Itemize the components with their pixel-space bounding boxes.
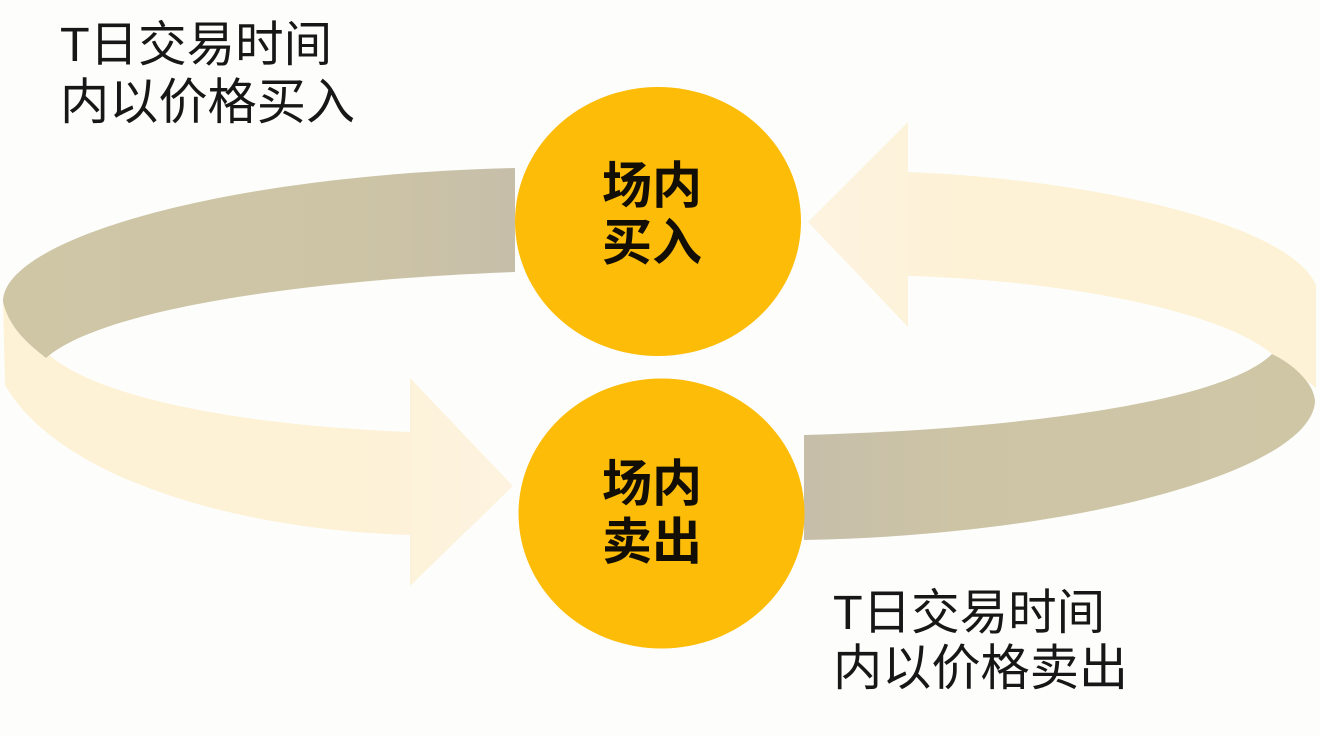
text: sell description: 内以价格卖出 <box>833 641 1128 696</box>
text: sell description: T日交易时间 <box>833 586 1105 640</box>
circle: buy <box>515 87 801 356</box>
circle: sell <box>518 378 804 648</box>
arrow: left tan band from buy circle <box>3 168 515 358</box>
text: sell description <box>833 586 1128 696</box>
text: buy description: 内以价格买入 <box>60 75 355 130</box>
arrow: right cream arrow to buy circle <box>808 122 1316 388</box>
arrow: left cream arrow to sell circle <box>3 302 513 586</box>
arrow: right tan band to sell circle <box>804 354 1315 540</box>
label: on-exchange sell <box>602 456 702 570</box>
label: on-exchange buy: 场内 <box>602 158 702 214</box>
label: on-exchange sell: 卖出 <box>602 514 702 570</box>
text: buy description: T日交易时间 <box>60 18 332 72</box>
text: buy description <box>60 18 355 130</box>
label: on-exchange buy <box>602 158 702 271</box>
label: on-exchange sell: 场内 <box>602 456 702 512</box>
label: on-exchange buy: 买入 <box>602 215 702 271</box>
